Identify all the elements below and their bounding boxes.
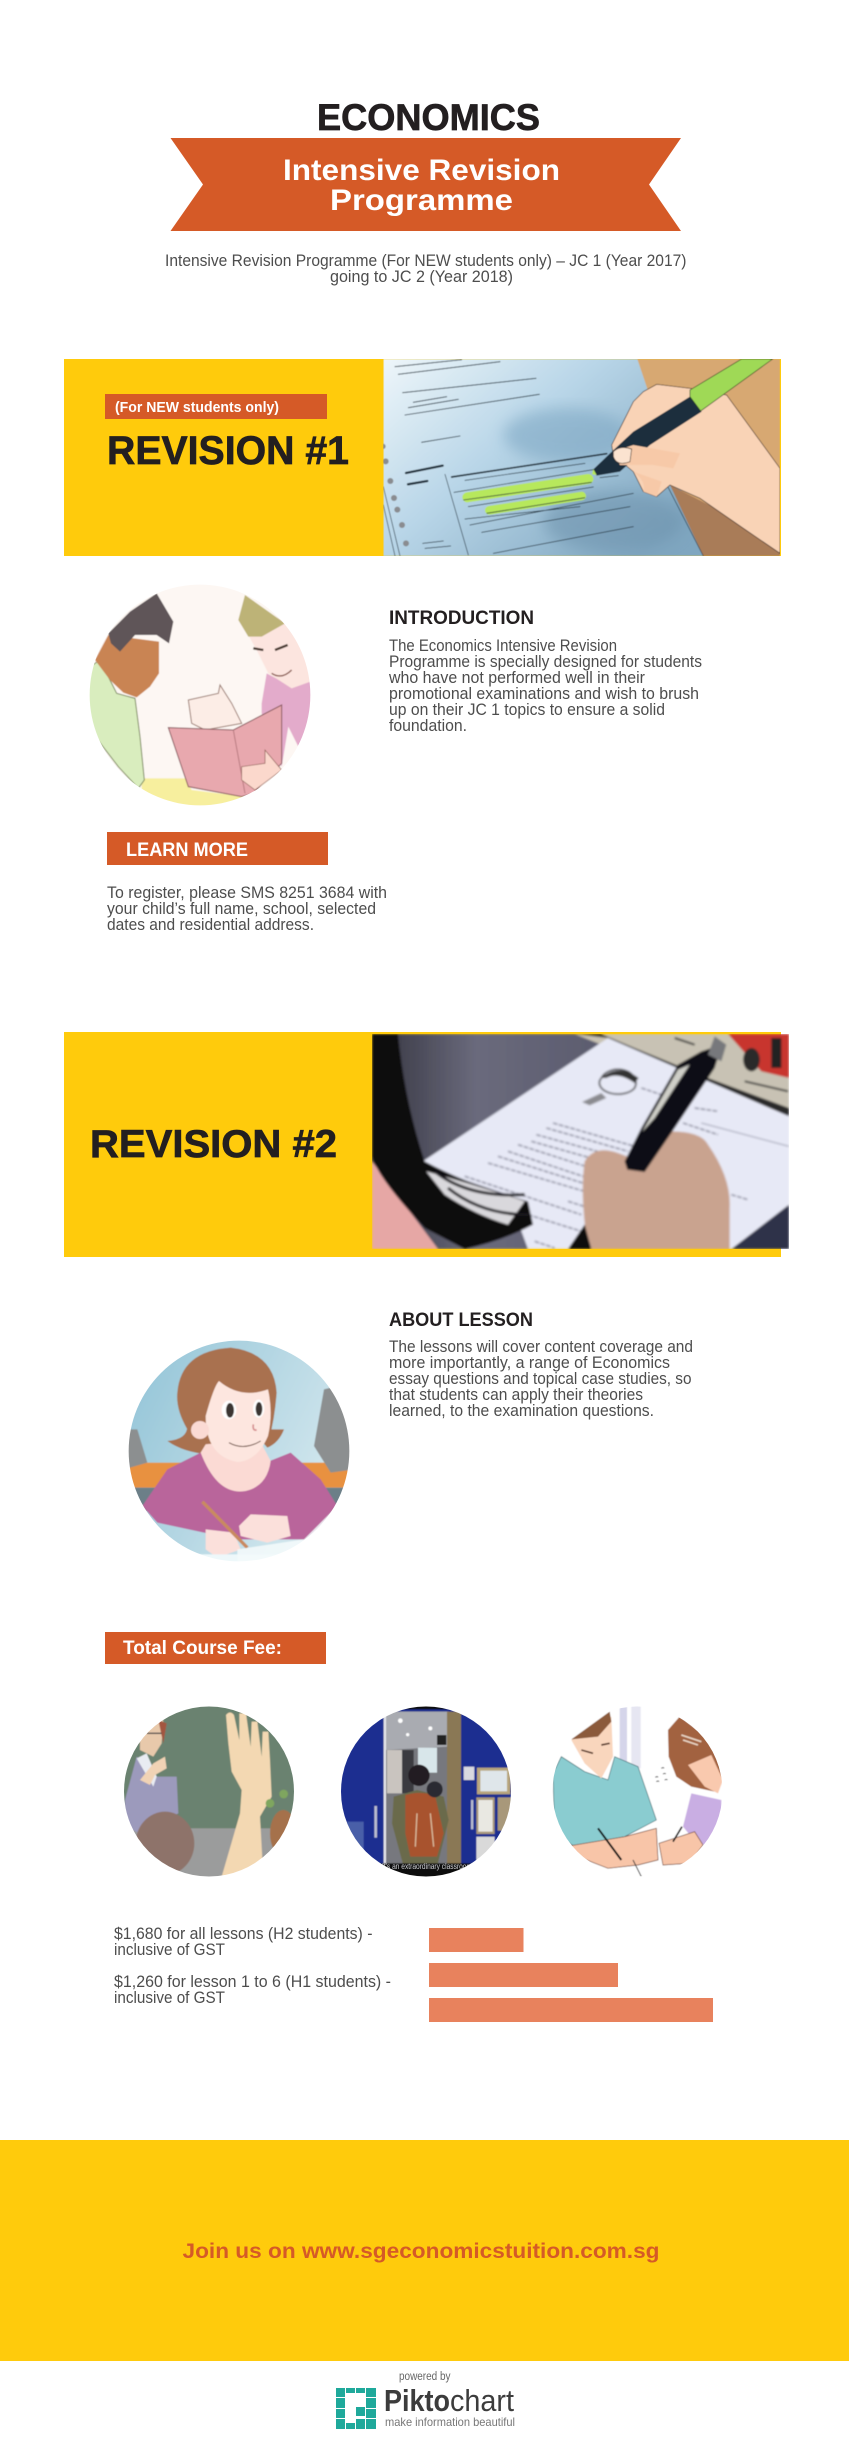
- heading: revision 2: REVISION #2: [90, 1123, 337, 1166]
- heading: about lesson: ABOUT LESSON: [389, 1310, 533, 1331]
- circle illustration: two students reading: [85, 580, 315, 810]
- text block: about lesson: essay questions and topical case studies, so: [389, 1370, 692, 1388]
- tag: for new students only: [105, 394, 327, 419]
- circle illustration: two students writing: [552, 1706, 722, 1876]
- hair and clothing: [372, 1161, 438, 1249]
- text block: introduction: foundation.: [389, 717, 467, 735]
- cartoon on paper: [599, 1069, 636, 1094]
- bar chart: [429, 1928, 713, 2022]
- subtitle: going to JC 2 (Year 2018): [330, 268, 513, 286]
- text block: introduction: who have not performed well in their: [388, 669, 645, 687]
- tag: total course fee: Total Course Fee:: [123, 1638, 282, 1659]
- text block: about lesson: that students can apply their theories: [389, 1386, 643, 1404]
- ribbon banner: [170, 138, 681, 231]
- powered by: powered by: [399, 2371, 451, 2383]
- circle photo: student entering classroom: [341, 1706, 511, 1876]
- footer band: [0, 2140, 849, 2361]
- circle illustration: smiling student: [124, 1336, 354, 1566]
- illustration: hand highlighting notes: [380, 359, 780, 556]
- caption: It's an extraordinary classroom: [382, 1861, 472, 1871]
- text block: about lesson: The lessons will cover content coverage and: [389, 1338, 693, 1356]
- text block: introduction: up on their JC 1 topics to ensure a solid: [389, 701, 665, 719]
- banner title: Programme: [330, 184, 513, 217]
- logo wordmark: Pikto: [384, 2383, 450, 2418]
- text block: H1 fee: $1,260 for lesson 1 to 6 (H1 students) -: [114, 1973, 391, 1991]
- text block: register: To register, please SMS 8251 3684 with: [107, 884, 387, 902]
- text block: register: dates and residential address.: [107, 916, 314, 934]
- text block: H2 fee: $1,680 for all lessons (H2 students) -: [114, 1925, 372, 1943]
- logo tagline: make information beautiful: [385, 2415, 515, 2429]
- banner title: Intensive Revision: [283, 154, 560, 187]
- text block: introduction: Programme is specially designed for students: [389, 653, 702, 671]
- heading: revision 1: REVISION #1: [107, 429, 349, 473]
- hand and pen: [583, 1131, 730, 1249]
- call to action: Join us on www.sgeconomicstuition.com.sg: [182, 2240, 660, 2263]
- tag: total course fee: [105, 1632, 326, 1664]
- text block: about lesson: learned, to the examination questions.: [389, 1402, 654, 1420]
- text block: H1 fee: inclusive of GST: [114, 1989, 225, 2007]
- button: learn more: [107, 832, 328, 865]
- button: learn more: LEARN MORE: [126, 840, 248, 861]
- text block: about lesson: more importantly, a range of Economics: [389, 1354, 670, 1372]
- text block: introduction: The Economics Intensive Revision: [389, 637, 617, 655]
- panel: revision 1: [64, 359, 781, 556]
- hand: [612, 384, 780, 553]
- tag: for new students only: (For NEW students only): [115, 400, 279, 416]
- text block: register: your child’s full name, school, selected: [107, 900, 376, 918]
- heading: introduction: INTRODUCTION: [389, 608, 534, 629]
- text block: introduction: promotional examinations and wish to brush: [389, 685, 699, 703]
- title: ECONOMICS: [317, 97, 540, 138]
- logo wordmark: chart: [450, 2383, 514, 2418]
- circle illustration: raised hand in class: [124, 1706, 294, 1876]
- icon: piktochart logo: [336, 2388, 376, 2429]
- photo: student writing on paper: [372, 1034, 789, 1249]
- subtitle: Intensive Revision Programme (For NEW students only) – JC 1 (Year 2017): [165, 252, 686, 270]
- panel: revision 2: [64, 1032, 789, 1257]
- text block: H2 fee: inclusive of GST: [114, 1941, 225, 1959]
